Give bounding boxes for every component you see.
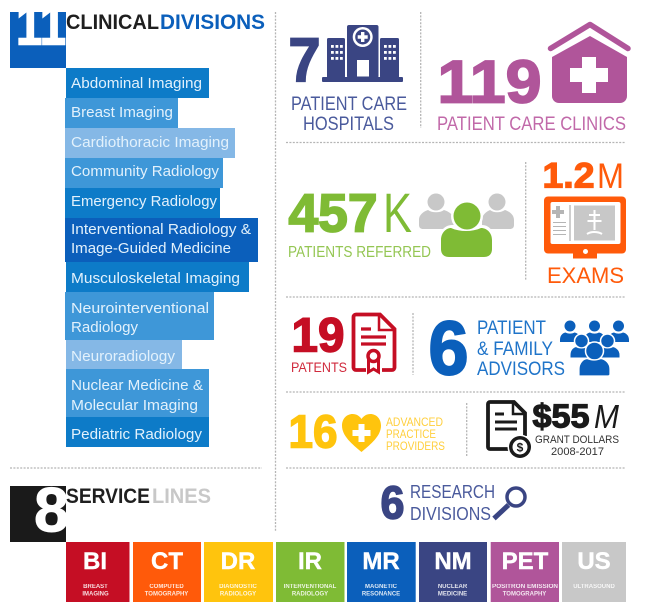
number: 6: 6 [428, 306, 468, 392]
panel: grant dollars [488, 398, 619, 460]
tile: US: ULTRASOUND [573, 584, 615, 590]
list: divisions: Radiology [71, 319, 138, 336]
panel: exams [542, 156, 626, 288]
tile: NM: NUCLEAR [438, 584, 468, 590]
panel: research divisions [380, 476, 525, 528]
label: advanced practice providers: ADVANCED [386, 417, 443, 429]
list: divisions: Molecular Imaging [71, 397, 198, 414]
list: divisions: Neuroradiology [71, 348, 176, 365]
tile: US: US [577, 548, 611, 575]
label: grant dollars: GRANT DOLLARS [535, 434, 619, 446]
tile: NM: NM [434, 548, 472, 575]
heading: service lines: SERVICE [66, 484, 150, 508]
tile: DR: DIAGNOSTIC [219, 584, 257, 590]
icon: doctors and patient [419, 194, 514, 260]
label: patients referred: PATIENTS REFERRED [288, 244, 431, 261]
label: patient care clinics: PATIENT CARE CLINICS [437, 114, 626, 135]
tile: IR [276, 542, 344, 602]
panel: service lines [10, 476, 626, 602]
list: divisions: Neurointerventional [71, 300, 209, 317]
tile: US [562, 542, 626, 602]
panel: patient care clinics [437, 24, 628, 135]
icon: clinic house [550, 24, 628, 103]
tile: PET: TOMOGRAPHY [503, 592, 546, 598]
tile: BI [66, 542, 130, 602]
list: divisions: Nuclear Medicine & [71, 377, 203, 394]
badge: 8 [10, 486, 66, 542]
label: patents: PATENTS [291, 360, 347, 375]
panel: patients referred [288, 181, 514, 261]
icon: hospital [322, 25, 403, 82]
list: divisions: Image-Guided Medicine [71, 240, 231, 257]
badge: 11 [10, 12, 66, 68]
heading: clinical divisions [66, 10, 265, 34]
tile: BI: BI [83, 548, 107, 575]
tile: IR: RADIOLOGY [292, 592, 328, 598]
label: patient and family advisors: & FAMILY [477, 338, 553, 360]
tile: DR [204, 542, 273, 602]
list: divisions: Breast Imaging [71, 104, 173, 121]
label: exams: EXAMS [547, 263, 624, 288]
heading: service lines [66, 484, 211, 508]
tile: PET: PET [502, 548, 549, 575]
unit: M: M [597, 157, 624, 196]
tile: MR: MAGNETIC [365, 584, 398, 590]
tile: MR: RESONANCE [362, 592, 400, 598]
tile: NM [419, 542, 487, 602]
heading: service lines: LINES [152, 484, 211, 508]
icon: exam monitor [544, 196, 626, 258]
icon: heart with plus [342, 414, 381, 452]
number: 7: 7 [288, 26, 320, 96]
label: advanced practice providers: PROVIDERS [386, 441, 445, 453]
icon: magnifying glass [494, 488, 525, 518]
label: patient care hospitals: HOSPITALS [303, 114, 394, 135]
number: 19: 19 [292, 310, 344, 362]
tile: BI: BREAST [83, 584, 108, 590]
tile: CT: CT [151, 548, 183, 575]
label: patient care hospitals: PATIENT CARE [291, 94, 407, 115]
label: patient and family advisors: ADVISORS [477, 358, 565, 380]
tile: PET [491, 542, 559, 602]
icon: group of advisors [560, 320, 629, 376]
heading: clinical divisions: DIVISIONS [160, 10, 265, 34]
unit: K: K [383, 181, 412, 244]
number: 119: 119 [438, 48, 542, 116]
heading: clinical divisions: CLINICAL [66, 10, 159, 34]
tile: DR: DR [221, 548, 255, 575]
tile: CT: COMPUTED [149, 584, 184, 590]
label: advanced practice providers [386, 417, 445, 453]
label: research divisions: DIVISIONS [410, 503, 491, 524]
list: divisions: Pediatric Radiology [71, 426, 202, 443]
tile: CT [133, 542, 201, 602]
list: divisions: Cardiothoracic Imaging [71, 134, 229, 151]
number: $55M: $55 [532, 398, 590, 434]
number: 457K: 457 [288, 184, 378, 244]
label: patient care hospitals [291, 94, 407, 135]
unit: M: M [594, 398, 619, 435]
number: 6: 6 [380, 476, 404, 528]
badge: 8: 8 [34, 476, 69, 546]
list: divisions: Interventional Radiology & [71, 221, 251, 238]
panel: patient and family advisors [428, 306, 629, 392]
list: divisions: Emergency Radiology [71, 193, 217, 210]
tile: NM: MEDICINE [438, 592, 467, 598]
label: grant dollars [535, 434, 619, 458]
label: research divisions: RESEARCH [410, 481, 495, 502]
label: patient and family advisors: PATIENT [477, 317, 546, 339]
label: research divisions [410, 481, 495, 524]
list: divisions: Community Radiology [71, 163, 219, 180]
tile: CT: TOMOGRAPHY [145, 592, 188, 598]
tile: PET: POSITRON EMISSION [492, 584, 558, 590]
tile: MR: MR [362, 548, 400, 575]
number: 16: 16 [288, 406, 338, 458]
icon: grant document with coin: $ [517, 440, 524, 454]
panel: patient care hospitals [288, 25, 407, 135]
label: patient and family advisors [477, 317, 565, 380]
label: grant dollars: 2008-2017 [551, 446, 604, 458]
panel: advanced practice providers [288, 406, 445, 458]
tile: BI: IMAGING [82, 592, 109, 598]
tile: DR: RADIOLOGY [220, 592, 256, 598]
panel: clinical divisions [10, 0, 265, 447]
tile: IR: IR [298, 548, 322, 575]
tile: MR [347, 542, 416, 602]
number: 1.2M: 1.2 [542, 156, 594, 196]
label: advanced practice providers: PRACTICE [386, 429, 436, 441]
list: divisions: Musculoskeletal Imaging [71, 270, 240, 287]
icon: patent document [354, 314, 394, 372]
list: divisions: Abdominal Imaging [71, 75, 202, 92]
tile: IR: INTERVENTIONAL [284, 584, 337, 590]
list: divisions [65, 68, 258, 447]
panel: patents [291, 310, 394, 375]
